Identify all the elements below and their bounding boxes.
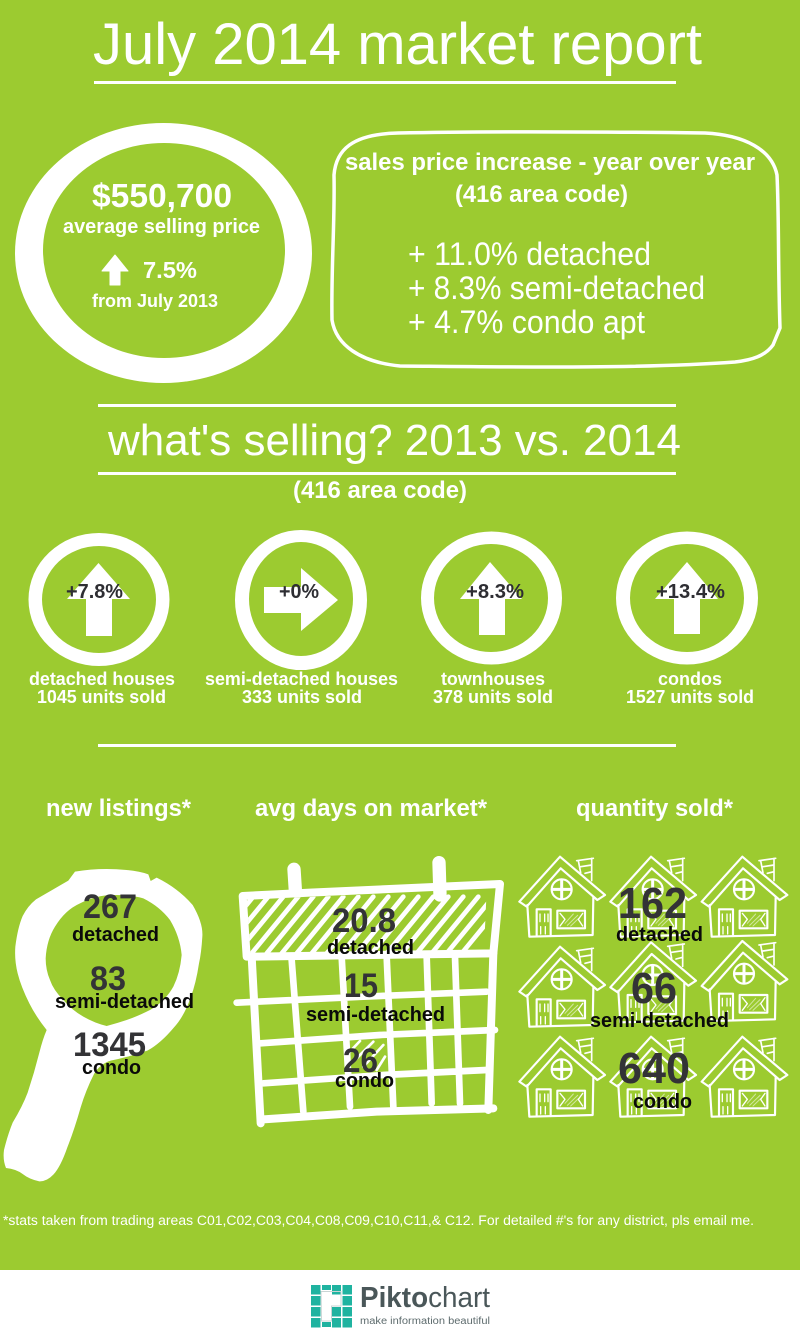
panel: days on market calendar — [207, 863, 508, 1123]
arrow — [67, 563, 130, 636]
logo tagline: make information beautiful — [360, 1316, 490, 1327]
hand-drawn frame — [332, 132, 780, 367]
condo quantity: 640 — [618, 1044, 690, 1093]
semi-detached increase: + 8.3% semi-detached — [408, 270, 705, 306]
detached days: 20.8 — [332, 902, 396, 940]
semi-detached count: 83 — [90, 960, 126, 998]
label: semi-detached houses — [205, 668, 398, 689]
icon: house grid — [519, 857, 787, 1117]
percentage: +8.3% — [466, 581, 524, 603]
stat: semi-detached houses — [205, 530, 398, 707]
units: 378 units sold — [433, 686, 553, 707]
heading: avg days on market: avg days on market* — [255, 796, 488, 822]
section subheading: (416 area code) — [293, 477, 467, 504]
heading: new listings: new listings* — [46, 796, 192, 822]
arrow — [264, 568, 338, 631]
panel: new listings magnifier — [4, 869, 202, 1181]
stat: townhouses — [421, 532, 562, 707]
change note: from July 2013 — [92, 291, 218, 311]
section heading: what's selling: what's selling? 2013 vs. 2014 — [107, 416, 681, 465]
arrow — [655, 562, 718, 634]
condo label: condo — [335, 1070, 394, 1092]
semi-detached label: semi-detached — [55, 991, 194, 1013]
logo mark — [311, 1285, 352, 1328]
icon: calendar — [207, 863, 508, 1123]
stat: detached houses — [28, 533, 175, 707]
ring — [235, 530, 367, 670]
semi-detached days: 15 — [344, 967, 378, 1005]
icon: magnifying glass — [4, 869, 202, 1181]
title: July 2014 market report — [93, 12, 702, 77]
stat: condos — [616, 532, 758, 707]
percentage: +0% — [279, 581, 319, 603]
semi-detached label: semi-detached — [590, 1010, 729, 1032]
units: 333 units sold — [242, 686, 362, 707]
ring — [616, 532, 758, 664]
condo days: 26 — [343, 1042, 378, 1080]
panel: sales price increase — [332, 132, 780, 367]
panel: average selling price — [15, 123, 312, 383]
footnote: *stats taken from trading areas C01,C02,C03,C04,C08,C09,C10,C11,& C12. For detailed #'s for any district, pls email me. — [3, 1213, 754, 1228]
units: 1527 units sold — [626, 686, 754, 707]
icon: up arrow — [102, 255, 128, 285]
ring — [15, 123, 312, 383]
price label: average selling price — [63, 216, 260, 238]
footer band — [0, 1270, 800, 1343]
ring — [28, 533, 170, 666]
label: townhouses — [441, 668, 545, 689]
arrow — [460, 562, 522, 635]
change value: 7.5% — [143, 257, 197, 283]
percentage: +7.8% — [66, 581, 123, 603]
label: condos — [658, 668, 722, 689]
detached label: detached — [616, 924, 703, 946]
Piktochart logo — [311, 1282, 490, 1328]
units: 1045 units sold — [37, 686, 166, 707]
logo wordmark: Piktochart — [360, 1282, 490, 1314]
detached label: detached — [72, 924, 159, 946]
ring — [421, 532, 562, 664]
detached increase: + 11.0% detached — [408, 236, 651, 272]
detached count: 267 — [83, 888, 137, 926]
condo label: condo — [82, 1057, 141, 1079]
panel heading: sales price increase - year over year — [345, 149, 755, 176]
condo increase: + 4.7% condo apt — [408, 304, 645, 340]
label: detached houses — [29, 668, 175, 689]
condo label: condo — [633, 1091, 692, 1113]
detached quantity: 162 — [618, 879, 687, 928]
percentage: +13.4% — [656, 581, 725, 603]
semi-detached quantity: 66 — [631, 964, 677, 1013]
panel: quantity sold houses — [519, 857, 787, 1117]
condo count: 1345 — [73, 1026, 146, 1064]
heading: quantity sold: quantity sold* — [576, 796, 734, 822]
detached label: detached — [327, 937, 414, 959]
panel subheading: (416 area code) — [455, 181, 628, 208]
price value: $550,700 — [92, 178, 232, 215]
semi-detached label: semi-detached — [306, 1004, 445, 1026]
